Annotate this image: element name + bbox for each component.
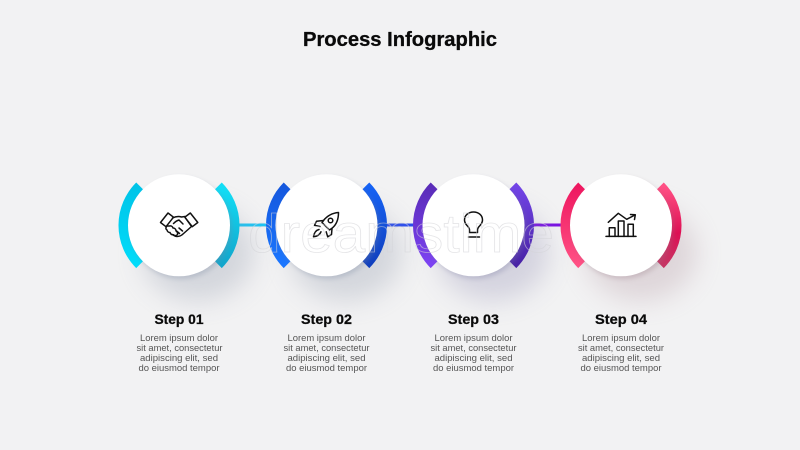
- step 1 description: adipiscing elit, sed: [140, 353, 218, 363]
- step 2 label: Step 02: [301, 311, 352, 327]
- step 1 description: Lorem ipsum dolor: [140, 333, 218, 343]
- step 3 label: Step 03: [448, 311, 499, 327]
- arc left purple: [418, 186, 435, 264]
- connector: step 1 to step 2: [236, 224, 270, 226]
- arc left blue: [271, 186, 288, 264]
- arc right blue: [365, 186, 382, 264]
- step 4 description: [578, 333, 664, 373]
- step 3 label: [430, 311, 516, 373]
- step 4 label: Step 04: [595, 311, 647, 327]
- icon: rocket: [314, 212, 338, 237]
- step 3 description: [430, 333, 516, 373]
- watermark: dreamstime: [248, 204, 554, 264]
- step 4 description: adipiscing elit, sed: [582, 353, 660, 363]
- step 1 description: [136, 333, 222, 373]
- step 1 description: sit amet, consectetur: [136, 343, 222, 353]
- step 2 description: sit amet, consectetur: [284, 343, 370, 353]
- step 4 description: sit amet, consectetur: [578, 343, 664, 353]
- step 2 description: [284, 333, 370, 373]
- arc left pink: [566, 186, 582, 264]
- arc right cyan: [218, 186, 234, 264]
- title: Process Infographic: [303, 29, 497, 51]
- step 3 description: sit amet, consectetur: [430, 343, 516, 353]
- step 2 description: adipiscing elit, sed: [288, 353, 366, 363]
- arc right pink: [660, 186, 676, 264]
- icon: light bulb: [464, 212, 482, 237]
- step 3 description: do eiusmod tempor: [433, 363, 514, 373]
- step 1 node: [124, 174, 254, 301]
- icon: growth chart: [606, 213, 636, 236]
- step 1 description: do eiusmod tempor: [138, 363, 220, 373]
- step 2 node: [271, 174, 402, 301]
- connector: step 3 to step 4: [530, 224, 564, 226]
- step 4 description: do eiusmod tempor: [580, 363, 662, 373]
- step 3 description: Lorem ipsum dolor: [434, 333, 512, 343]
- step 2 description: Lorem ipsum dolor: [288, 333, 366, 343]
- step 3 node: [418, 174, 549, 301]
- step 1 label: Step 01: [154, 311, 204, 327]
- step 2 description: do eiusmod tempor: [286, 363, 367, 373]
- step 3 description: adipiscing elit, sed: [434, 353, 512, 363]
- arc left cyan: [124, 186, 140, 264]
- arc right purple: [512, 186, 529, 264]
- step 4 node: [566, 174, 697, 301]
- connector: step 2 to step 3: [384, 224, 418, 226]
- step 1 label: [136, 311, 222, 373]
- icon: handshake: [160, 213, 198, 236]
- step 2 label: [284, 311, 370, 373]
- step 4 description: Lorem ipsum dolor: [582, 333, 660, 343]
- step 4 label: [578, 311, 664, 373]
